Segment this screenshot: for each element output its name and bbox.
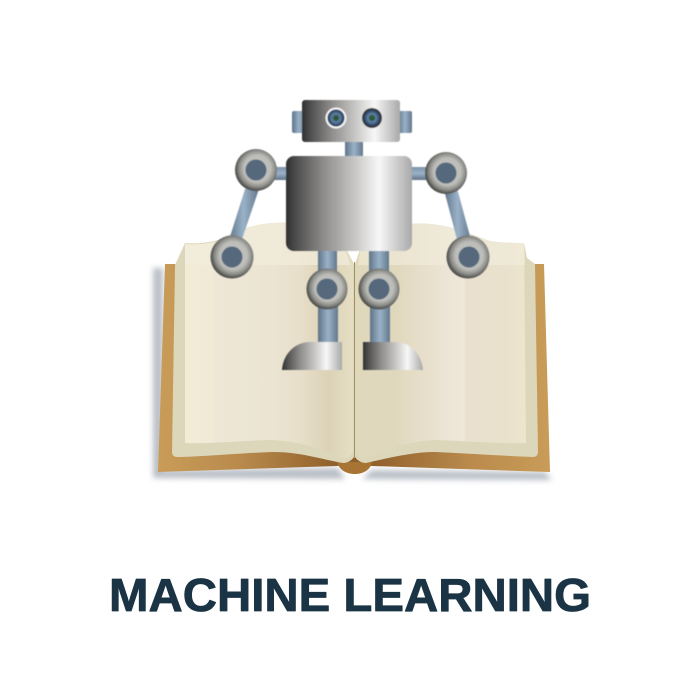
joint: right hand [446, 236, 490, 278]
joint: right knee [358, 268, 400, 310]
robot [210, 100, 490, 370]
ears [292, 111, 412, 133]
left cover [158, 264, 356, 472]
head [302, 100, 400, 142]
top page highlight right [358, 224, 525, 265]
open book [153, 223, 552, 480]
left foot [282, 342, 342, 370]
joint: right shoulder [425, 152, 467, 194]
eye right [362, 108, 382, 128]
left arm [228, 167, 290, 245]
right cover [354, 264, 550, 472]
right page edge [355, 224, 538, 463]
legs [318, 250, 390, 344]
title: MACHINE LEARNING [109, 569, 591, 621]
joint: left hand [210, 236, 254, 278]
joint: left shoulder [235, 149, 277, 191]
neck [345, 140, 363, 158]
spine [337, 462, 372, 474]
right arm [410, 167, 471, 243]
top page highlight left [185, 223, 350, 265]
right page [356, 224, 526, 458]
right foot [363, 342, 423, 370]
book gutter line [354, 262, 356, 458]
body [286, 156, 412, 251]
left page [185, 223, 353, 458]
left page edge [172, 223, 354, 463]
joint: left knee [306, 268, 348, 310]
book shadow [153, 268, 552, 480]
eye left [326, 108, 346, 128]
